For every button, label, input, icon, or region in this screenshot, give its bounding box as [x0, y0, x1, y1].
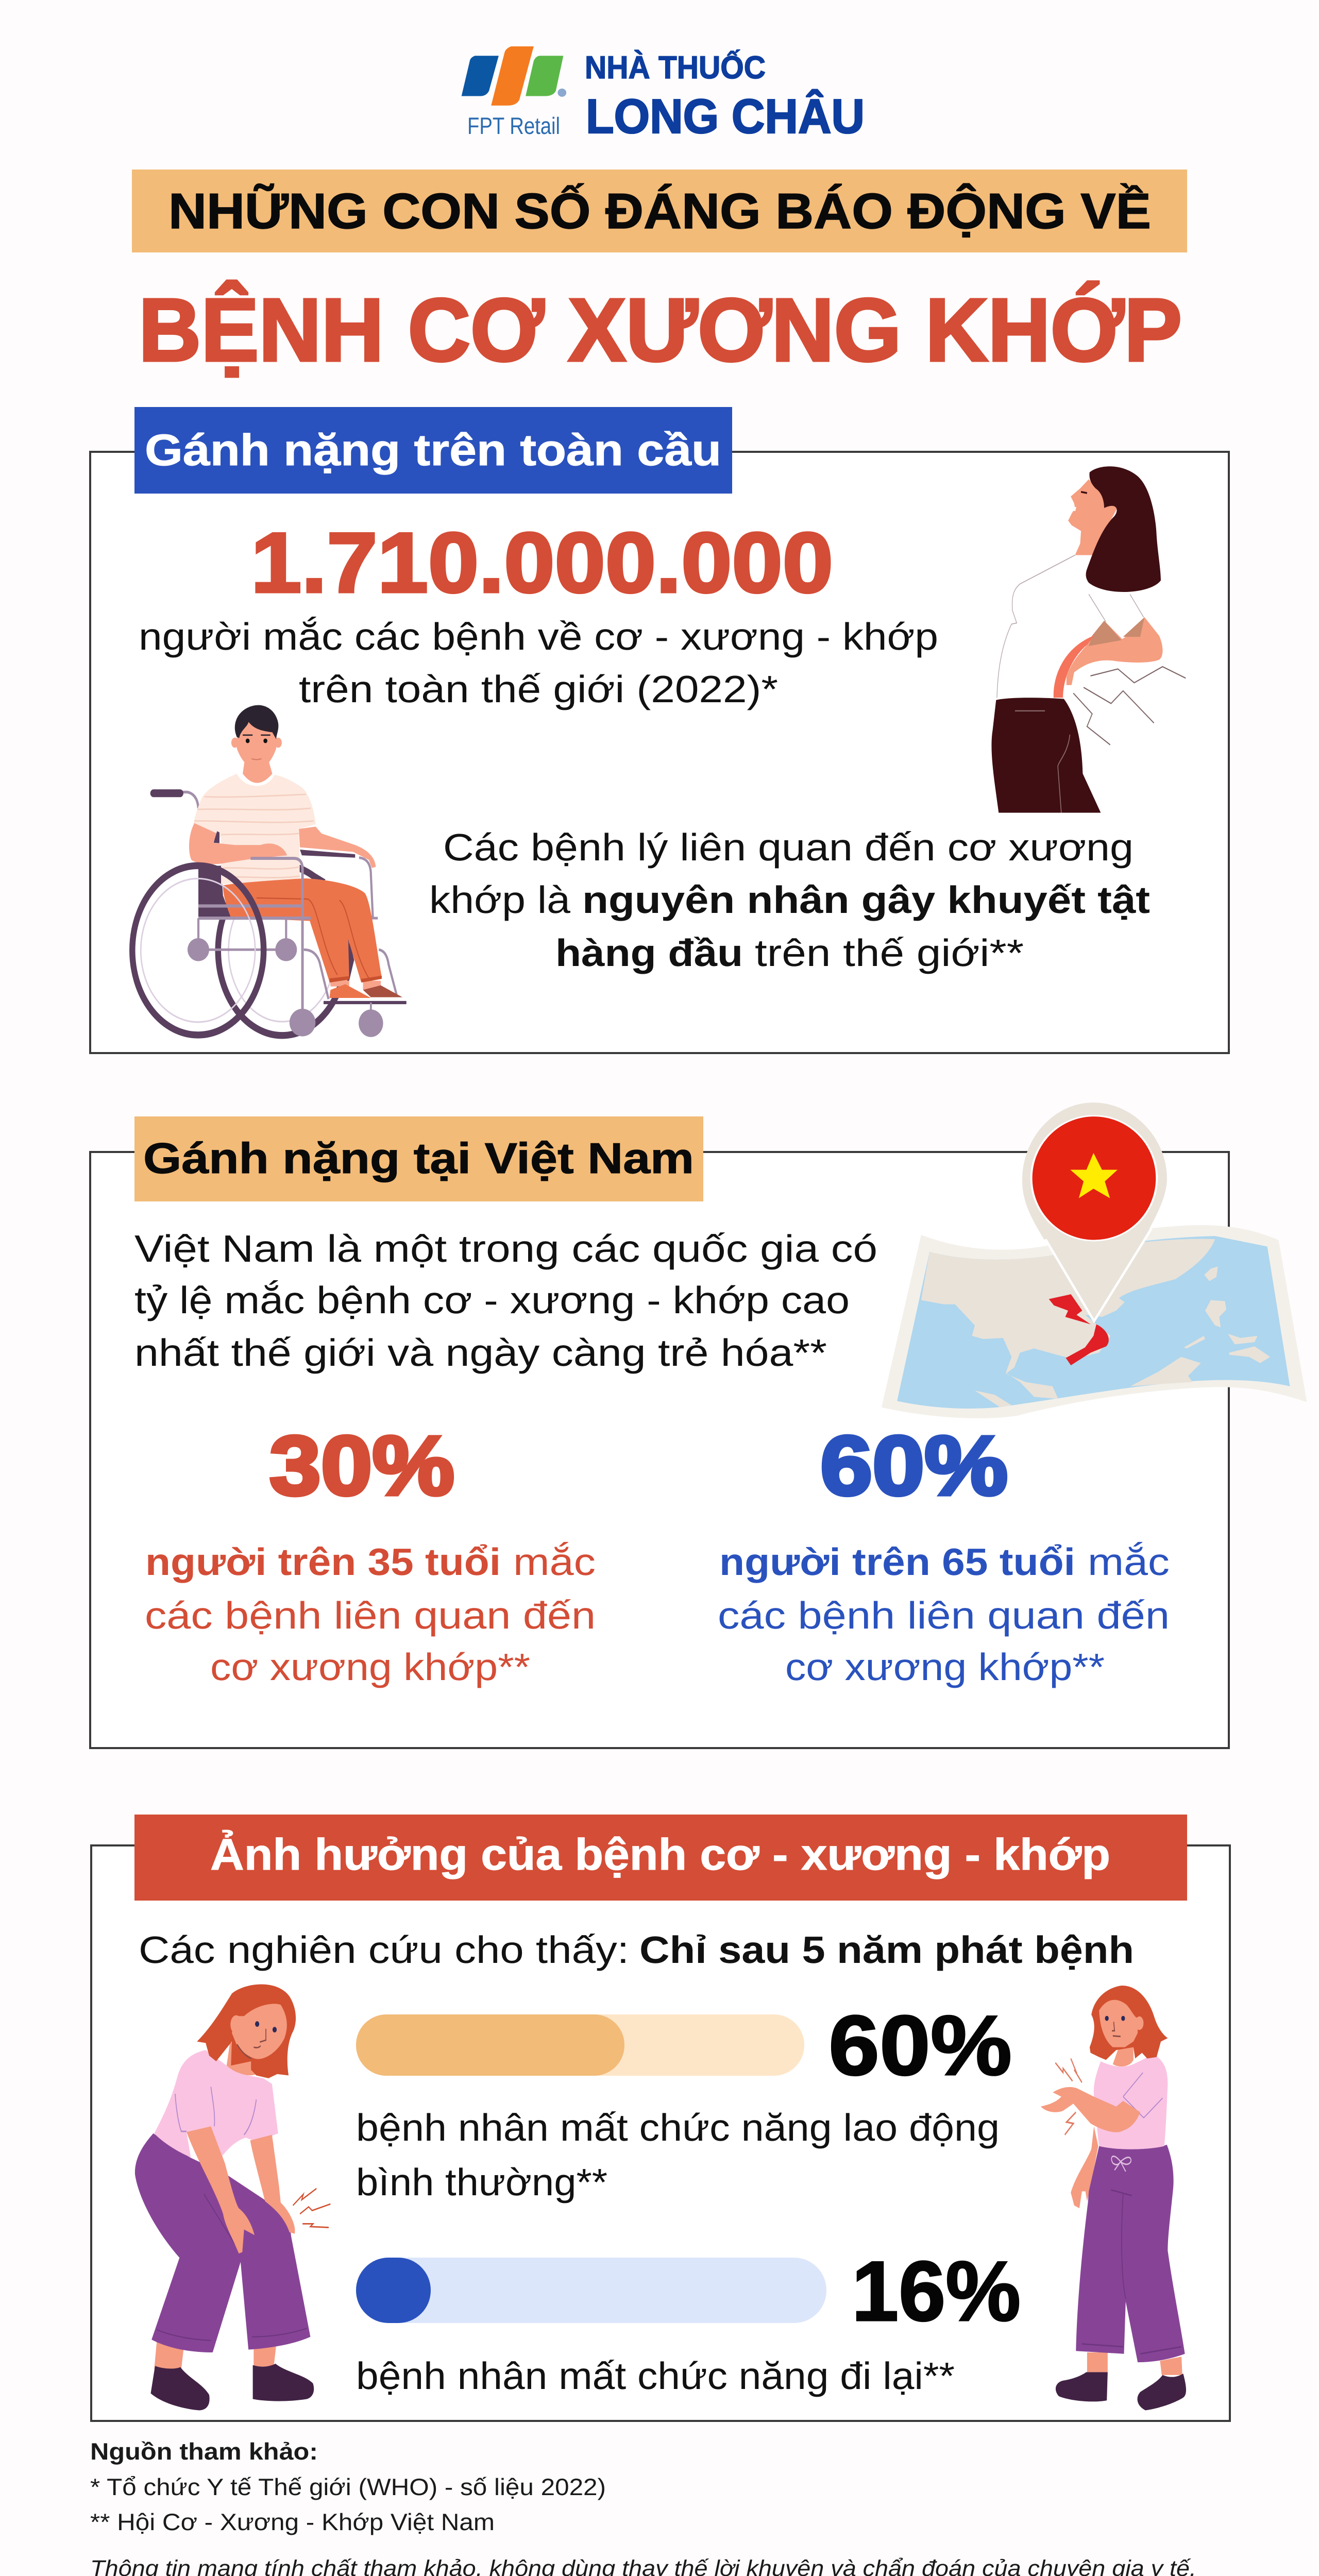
- text block: research intro: Các nghiên cứu cho thấy:: [139, 1928, 629, 1971]
- text block: research intro: [139, 1928, 1134, 1971]
- stat: 60 percent: cơ xương khớp**: [785, 1646, 1105, 1688]
- stat: 30 percent: 30%: [269, 1418, 454, 1513]
- icon: woman holding wrist: [1041, 1986, 1186, 2410]
- text block: Vietnam intro: nhất thế giới và ngày càng trẻ hóa**: [134, 1331, 827, 1374]
- icon: woman with back pain: [991, 466, 1186, 812]
- panel: effects of the disease: [91, 1815, 1230, 2421]
- stat: 60 percent: mắc: [1088, 1540, 1170, 1583]
- text block: leading cause of disability: nguyên nhân gây khuyết tật: [582, 878, 1150, 921]
- stat: 30 percent: cơ xương khớp**: [210, 1646, 530, 1688]
- heading: global burden: Gánh nặng trên toàn cầu: [145, 426, 721, 475]
- text block: leading cause of disability: trên thế giới**: [755, 931, 1024, 974]
- panel: global burden: [90, 407, 1229, 1053]
- logo: FPT Retail Nhà thuốc Long Châu: [462, 46, 865, 143]
- stat: 30 percent: [145, 1418, 596, 1688]
- chart: 16 percent progress bar: 16%: [852, 2244, 1021, 2338]
- text block: leading cause of disability: hàng đầu: [555, 931, 743, 974]
- footer: references: Nguồn tham khảo:: [90, 2438, 318, 2465]
- text block: leading cause of disability: [429, 826, 1150, 974]
- stat: 30 percent: mắc: [513, 1540, 596, 1583]
- text block: Vietnam intro: Việt Nam là một trong các quốc gia có: [134, 1227, 877, 1270]
- text block: leading cause of disability: Các bệnh lý liên quan đến cơ xương: [443, 826, 1134, 869]
- heading: global burden: [134, 407, 732, 494]
- text block: loss of work ability: bình thường**: [356, 2161, 607, 2204]
- title banner: NHỮNG CON SỐ ĐÁNG BÁO ĐỘNG VỀ: [168, 183, 1151, 239]
- heading: effects: Ảnh hưởng của bệnh cơ - xương - khớp: [210, 1829, 1110, 1879]
- text block: loss of mobility: bệnh nhân mất chức năng đi lại**: [356, 2354, 955, 2397]
- text block: leading cause of disability: khớp là: [429, 878, 571, 921]
- icon: FPT logo mark: [462, 46, 566, 106]
- icon: woman holding knee: [135, 1985, 330, 2410]
- stat: 60 percent: các bệnh liên quan đến: [718, 1594, 1170, 1637]
- icon: map with Vietnam pin: [882, 1103, 1307, 1418]
- stat: 60 percent: [718, 1418, 1170, 1688]
- text block: loss of work ability: bệnh nhân mất chức năng lao động: [356, 2106, 1000, 2149]
- chart: 60 percent progress bar: 60%: [828, 1998, 1012, 2093]
- main title: BỆNH CƠ XƯƠNG KHỚP: [139, 280, 1182, 380]
- heading: Vietnam burden: [134, 1116, 703, 1201]
- text block: research intro: Chỉ sau 5 năm phát bệnh: [639, 1928, 1134, 1971]
- title banner: [132, 170, 1187, 252]
- heading: Vietnam burden: Gánh nặng tại Việt Nam: [143, 1134, 694, 1182]
- logo: FPT Retail Nhà thuốc Long Châu: NHÀ THUỐC: [585, 49, 766, 86]
- stat: 60 percent: 60%: [820, 1418, 1008, 1513]
- chart: 16 percent progress bar: [356, 2244, 1021, 2338]
- heading: effects: [134, 1815, 1187, 1901]
- big number: 1.710.000.000: [251, 515, 833, 610]
- footer: references: * Tổ chức Y tế Thế giới (WHO) - số liệu 2022): [90, 2473, 606, 2500]
- stat: 60 percent: người trên 65 tuổi: [719, 1540, 1075, 1583]
- text block: patients worldwide: [139, 615, 938, 710]
- stat: 30 percent: người trên 35 tuổi: [145, 1540, 501, 1583]
- text block: Vietnam intro: [134, 1227, 877, 1374]
- text block: patients worldwide: trên toàn thế giới (2022)*: [299, 668, 778, 710]
- icon: man in wheelchair: [132, 705, 407, 1037]
- text block: loss of work ability: [356, 2106, 1000, 2204]
- logo: FPT Retail Nhà thuốc Long Châu: FPT Retail: [467, 112, 560, 139]
- stat: 30 percent: các bệnh liên quan đến: [145, 1594, 596, 1637]
- text block: patients worldwide: người mắc các bệnh về cơ - xương - khớp: [139, 615, 938, 658]
- text block: Vietnam intro: tỷ lệ mắc bệnh cơ - xương - khớp cao: [134, 1279, 850, 1321]
- chart: 60 percent progress bar: [356, 1998, 1012, 2093]
- logo: FPT Retail Nhà thuốc Long Châu: LONG CHÂU: [586, 89, 865, 143]
- footer: references: [90, 2438, 1196, 2576]
- footer: references: ** Hội Cơ - Xương - Khớp Việt Nam: [90, 2509, 495, 2535]
- panel: Vietnam burden: [90, 1103, 1307, 1748]
